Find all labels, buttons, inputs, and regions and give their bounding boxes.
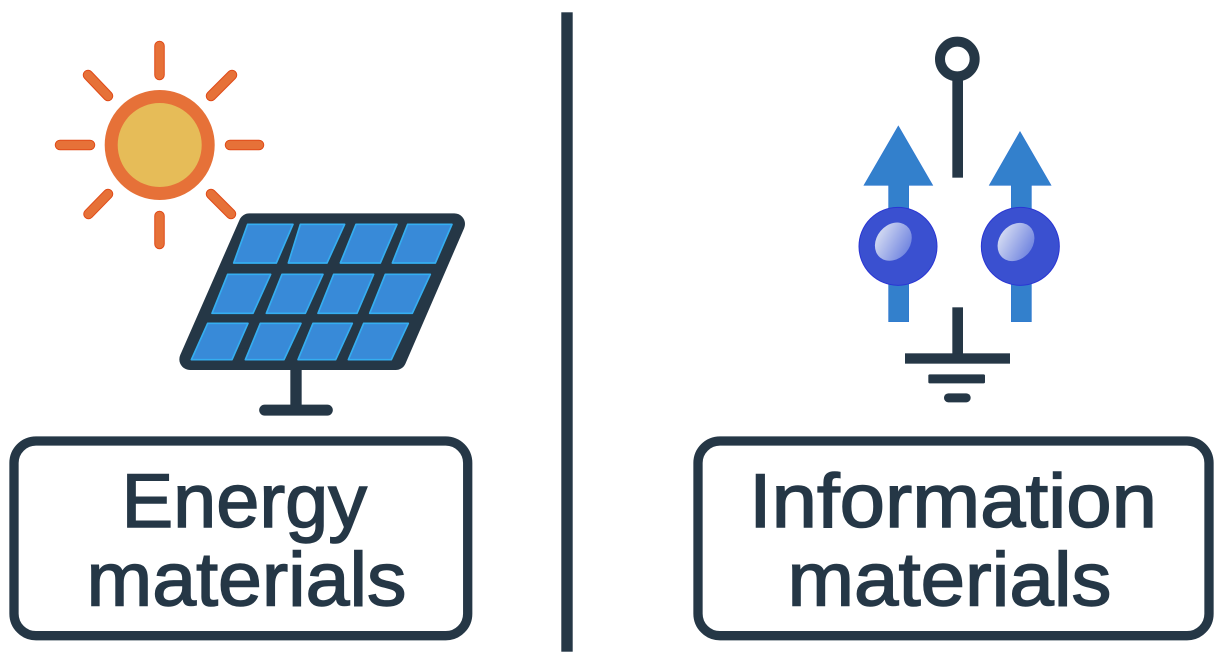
heading: materials: materials: [788, 538, 1112, 622]
icon: solar panel: [190, 224, 454, 416]
solar cells: [191, 224, 452, 360]
panel frame: [190, 224, 454, 359]
icon: spin circuit: [859, 42, 1059, 402]
label: information materials: [698, 441, 1209, 636]
terminal stem: [952, 79, 963, 178]
right electron: [981, 207, 1059, 285]
label box: [14, 441, 468, 636]
central divider: [561, 12, 573, 652]
ground symbol: [905, 307, 1010, 402]
left spin arrow: [864, 126, 933, 322]
left electron: [859, 207, 937, 285]
right spin arrow: [989, 132, 1051, 322]
panel stand: [259, 367, 333, 416]
icon: sun: [60, 46, 259, 244]
heading: materials: materials: [86, 538, 406, 622]
label: energy materials: [14, 441, 468, 636]
sun disc: [111, 96, 208, 194]
heading: Information: Information: [749, 459, 1157, 544]
sun rays: [60, 46, 259, 244]
terminal ring: [940, 42, 975, 76]
heading: Energy: Energy: [122, 459, 367, 544]
label box: [698, 441, 1209, 636]
